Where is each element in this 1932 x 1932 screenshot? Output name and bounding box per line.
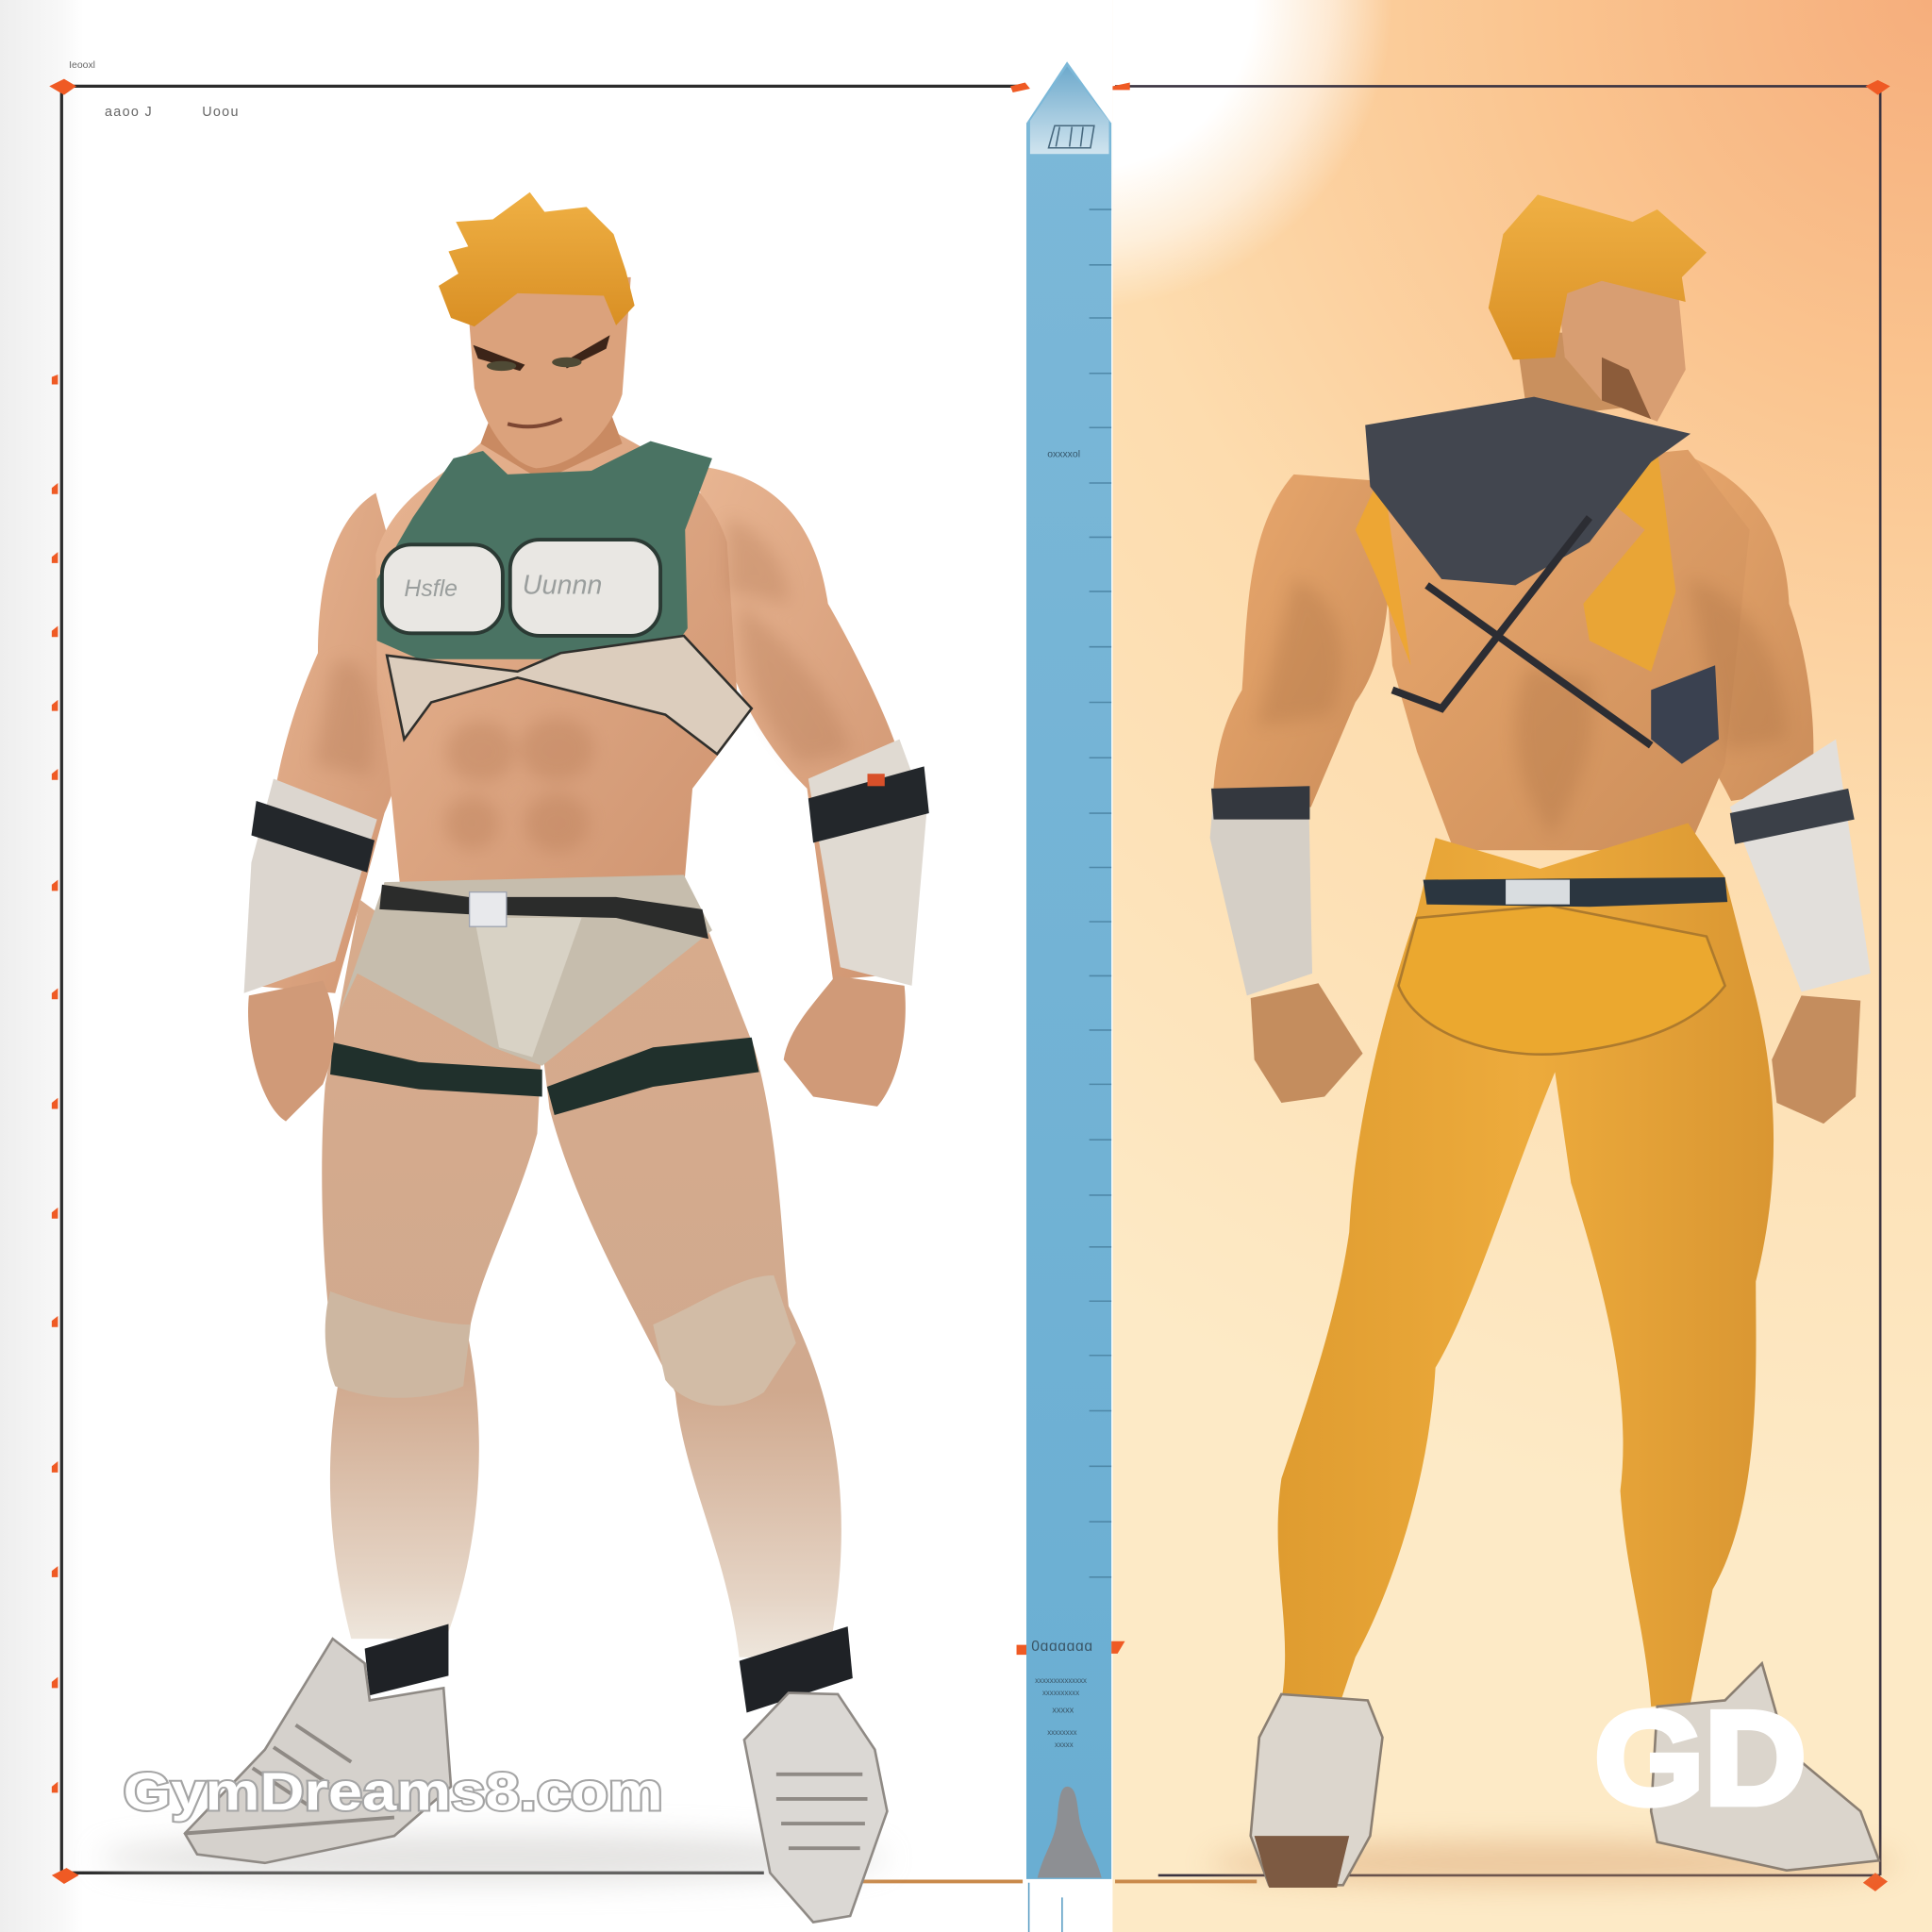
back right bracer [1730,740,1871,991]
ruler bottom text: xxxxxxxxxx [1042,1689,1079,1697]
eyes and brows [474,335,610,426]
back left bracer [1210,786,1312,995]
background: right panel gradient [1112,0,1932,1932]
back left shoe [1251,1694,1382,1885]
ruler bottom text: xxxxx [1055,1740,1074,1749]
back right arm [1651,456,1813,801]
back figure [1210,194,1879,1888]
shoulder and arm muscle shading [314,518,850,776]
chest pad right [510,540,660,636]
belt buckle [470,892,507,926]
abdomen shading [445,717,594,853]
back belt [1424,877,1727,907]
chest armor green [377,441,712,659]
right arm [696,466,909,979]
ruler bottom text: xxxxxxxx [1047,1728,1077,1737]
legs [322,899,542,1639]
top left small labels: aaoo J [105,105,153,120]
left fist [248,981,334,1122]
frame: left panel border [61,86,1023,1873]
top left small labels [69,60,240,120]
tights [1278,823,1774,1713]
ruler bottom text [1031,1639,1093,1749]
beard [1602,358,1651,419]
dark side pack [1651,665,1719,764]
knee pads [325,1291,471,1398]
yellow shoulder left [1356,471,1411,665]
height ruler [1026,61,1111,1879]
back hair [1489,194,1707,359]
chest pad right: Uunnn [523,571,602,601]
thigh straps [330,1038,759,1115]
floor shadow: back figure [1208,1840,1897,1885]
ruler label: oxxxxol [1047,450,1080,460]
head [466,277,631,468]
left ankle band [365,1624,448,1695]
left shoe [185,1639,451,1863]
right ankle band [740,1626,853,1713]
back right shoe [1651,1663,1879,1871]
watermark: site name: GymDreams8.com [124,1762,663,1822]
left bracer [244,778,377,993]
neck [480,394,623,480]
tights seat panel [1398,906,1725,1055]
background: left panel [0,0,1115,1932]
torso [375,425,740,890]
chest pad left [382,544,503,633]
ruler bottom text: 0ɑɑɑɑɑɑ [1031,1639,1093,1655]
right fist [784,975,906,1107]
ruler tick marks [1090,209,1111,1577]
floor shadow: front figure [98,1834,887,1883]
shorts [340,874,712,1066]
ruler top icon [1049,125,1094,148]
ruler bottom figure icon [1038,1787,1102,1878]
left arm [251,492,411,993]
back left arm [1212,475,1389,813]
back torso [1380,450,1750,850]
ruler bottom text: xxxxx [1052,1706,1074,1715]
frame: right panel border [1115,86,1880,1875]
ruler bottom text: xxxxxxxxxxxxxx [1035,1676,1087,1685]
watermark: GD logo: GD [1594,1683,1807,1832]
right shoe [744,1693,887,1923]
top left small labels: Ieooxl [69,60,95,71]
head back [1555,265,1686,422]
front figure [185,192,929,1923]
neck back [1516,333,1633,419]
chest pad left: Hsfle [404,576,458,602]
belt [379,885,708,939]
hair [439,192,635,326]
back right fist [1772,995,1860,1124]
right bracer [808,740,929,986]
chest armor lower band [387,636,752,754]
back left fist [1251,983,1363,1103]
blue guide line and floor line [862,1881,1257,1932]
crossing straps [1392,518,1651,745]
dark shoulder yoke [1365,397,1690,585]
back shading [1257,579,1787,838]
top left small labels: Uoou [202,105,240,120]
yellow shoulder right [1583,450,1675,672]
back left heel [1255,1836,1349,1888]
